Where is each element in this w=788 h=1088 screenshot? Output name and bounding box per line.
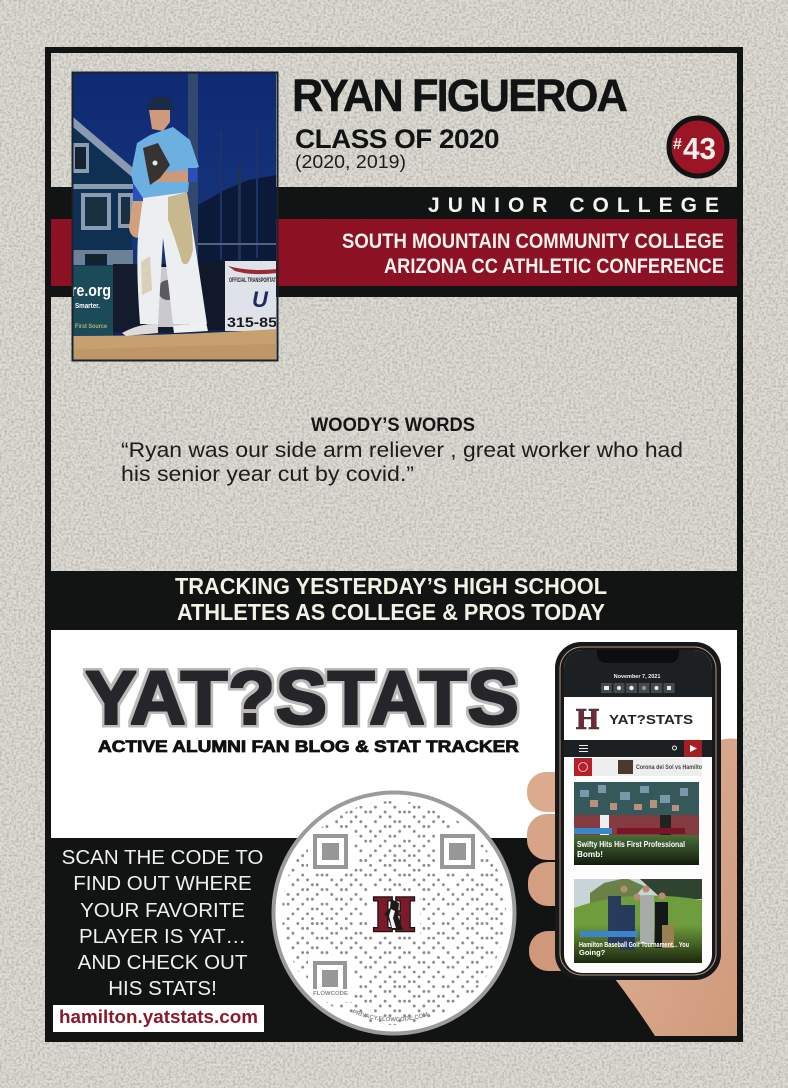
privacy label: PRIVACY.FLOWCODE.COM	[352, 1009, 428, 1022]
pants	[137, 192, 207, 324]
jersey number badge	[669, 118, 727, 176]
flowcode label: FLOWCODE	[313, 991, 348, 997]
head	[149, 110, 170, 131]
conference name: ARIZONA CC ATHLETIC CONFERENCE	[384, 255, 724, 278]
player name: RYAN FIGUEROA	[292, 70, 627, 121]
tracking banner: TRACKING YESTERDAY’S HIGH SCHOOL	[175, 573, 607, 599]
white promo panel	[51, 630, 737, 838]
phone nav bar	[564, 740, 712, 757]
forearm	[154, 170, 188, 182]
quote heading: WOODY’S WORDS	[311, 415, 475, 436]
phone logo band	[564, 697, 712, 740]
maroon band: college	[51, 219, 737, 286]
phone story 2: Hamilton Baseball Golf Tournament... You	[579, 940, 689, 949]
phone story 1: Bomb!	[577, 850, 603, 859]
outfield banners: re.org	[71, 281, 111, 300]
finger 2	[527, 814, 555, 860]
bare arm	[129, 200, 142, 238]
QR code	[272, 790, 516, 1036]
phone logo band: YAT?STATS	[609, 712, 693, 727]
jersey	[131, 127, 199, 198]
black band: division	[51, 187, 737, 297]
scan instructions	[62, 846, 263, 1000]
outfield banners: Smarter.	[75, 303, 100, 310]
YAT?STATS logo: YAT?STATS	[85, 656, 519, 741]
glove	[143, 143, 170, 185]
school H logo: H	[372, 888, 416, 942]
finder squares	[308, 829, 480, 1002]
card frame	[48, 50, 740, 1039]
house	[73, 117, 133, 265]
website link box: hamilton.yatstats.com	[59, 1006, 258, 1027]
black lower panel	[51, 838, 737, 1036]
outfield banners: 315-85	[227, 314, 277, 330]
outfield banners: U	[252, 287, 269, 312]
phone story 1	[574, 782, 699, 865]
phone story 2	[574, 878, 702, 963]
quote text: his senior year cut by covid.”	[121, 463, 414, 486]
quote text	[121, 439, 683, 486]
outfield banners: OFFICIAL TRANSPORTAT	[229, 277, 276, 284]
tracking banner	[51, 571, 737, 630]
class year: CLASS OF 2020	[295, 124, 499, 154]
phone header	[564, 650, 712, 697]
phone logo band: H	[575, 705, 600, 736]
shoes	[122, 324, 158, 336]
trees and fence	[198, 128, 277, 262]
finger 1	[527, 772, 555, 812]
phone header: November 7, 2021	[614, 674, 660, 680]
division label: JUNIOR COLLEGE	[428, 194, 719, 217]
palm and wrist	[612, 738, 737, 1036]
jersey number badge: #	[673, 136, 682, 153]
scan instructions: FIND OUT WHERE	[73, 872, 252, 895]
tracking banner: ATHLETES AS COLLEGE & PROS TODAY	[177, 599, 605, 625]
hand holding phone	[527, 738, 737, 1036]
quote text: “Ryan was our side arm reliever , great worker who had	[121, 439, 683, 462]
phone story 2: Going?	[579, 948, 606, 957]
phone story 1: Swifty Hits His First Professional	[577, 840, 685, 849]
tagline: ACTIVE ALUMNI FAN BLOG & STAT TRACKER	[98, 738, 519, 756]
scan instructions: HIS STATS!	[108, 977, 217, 1000]
scan instructions: SCAN THE CODE TO	[62, 846, 263, 869]
photo border	[72, 72, 278, 360]
college name: SOUTH MOUNTAIN COMMUNITY COLLEGE	[342, 230, 724, 253]
pitcher	[122, 95, 208, 336]
pitcher's mound	[73, 329, 277, 361]
scan instructions: YOUR FAVORITE	[80, 899, 245, 922]
smartphone	[555, 642, 721, 980]
phone ticker: Corona del Sol vs Hamilto	[636, 764, 702, 771]
scan instructions: AND CHECK OUT	[78, 951, 248, 974]
scan instructions: PLAYER IS YAT…	[79, 925, 246, 948]
finger 3	[528, 862, 555, 906]
jersey number badge: 43	[683, 131, 716, 166]
finger 4	[529, 931, 562, 971]
light pole	[188, 73, 198, 263]
outfield banners	[71, 261, 277, 336]
seasons: (2020, 2019)	[295, 152, 406, 172]
sleeve	[133, 183, 143, 201]
player photo	[71, 72, 278, 362]
outfield banners: First Source	[75, 323, 107, 330]
phone ticker	[574, 758, 702, 776]
